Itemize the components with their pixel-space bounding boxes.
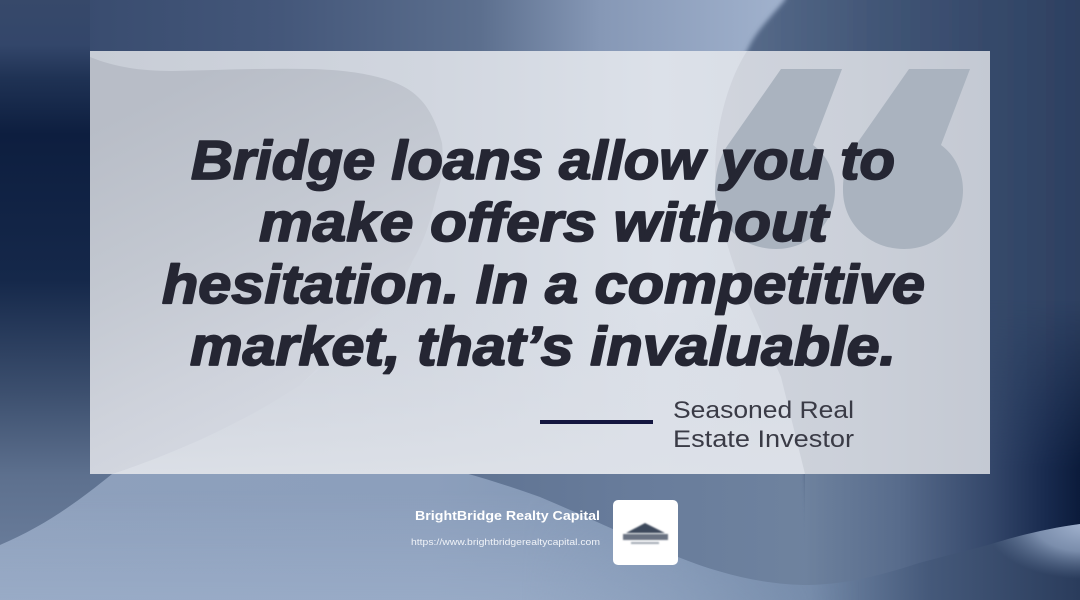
quote text: Bridge loans allow you to xyxy=(191,129,895,191)
panel background curves xyxy=(90,51,990,474)
attribution text: Seasoned Real xyxy=(673,397,854,424)
attribution text xyxy=(674,400,854,447)
attribution text: Estate Investor xyxy=(673,426,854,453)
quote text: hesitation. In a competitive xyxy=(162,253,925,315)
icon: quotation mark xyxy=(715,69,970,249)
quote text: make offers without xyxy=(259,191,831,253)
attribution rule xyxy=(540,420,653,424)
logo xyxy=(613,500,678,565)
company name: BrightBridge Realty Capital xyxy=(415,508,600,523)
icon: bridge logo xyxy=(623,523,668,544)
quote text: market, that’s invaluable. xyxy=(190,315,896,377)
company url: https://www.brightbridgerealtycapital.com xyxy=(411,537,600,548)
panel: quote card xyxy=(90,51,990,474)
quote text xyxy=(162,129,925,377)
